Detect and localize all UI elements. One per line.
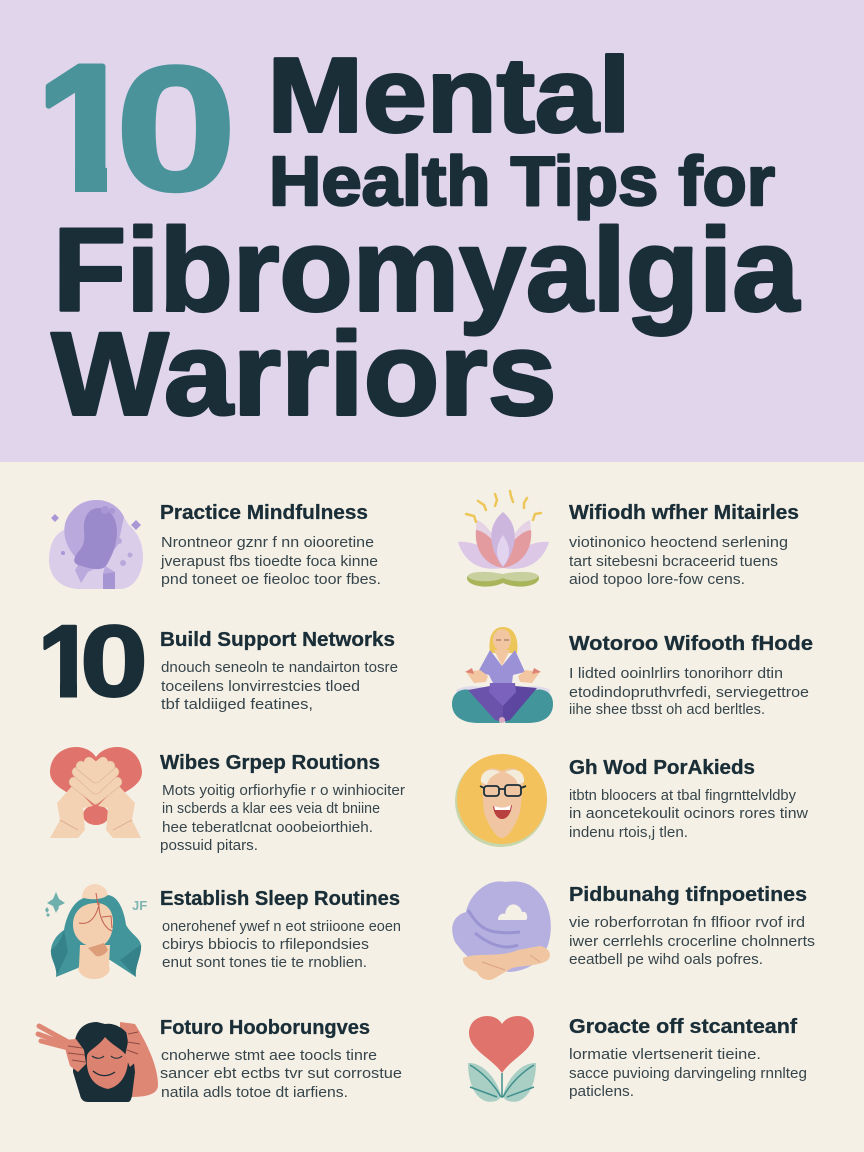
body text [569,787,808,841]
icon: laughing face with glasses [455,754,547,847]
body text: toceilens lonvirrestcies tloed [161,678,360,695]
body text: eeatbell pe wihd oals pofres. [569,951,763,968]
header band with title [0,0,864,462]
body text: natila adls totoe dt iarfiens. [161,1084,348,1101]
body text [160,782,405,854]
body text: sacce puvioing darvingeling rnnlteg [569,1065,807,1082]
icon: woman with teal hair: JF [132,898,147,913]
title line: Warriors: Warriors [52,308,556,440]
body text [569,1046,807,1100]
heading: Groacte off stcanteanf [569,1016,797,1038]
body text: hee teberatlcnat ooobeiorthieh. [162,819,373,836]
heading: Wibes Grpep Routions [160,752,380,774]
body text [569,914,815,968]
heading: Build Support Networks [160,629,395,651]
body text [160,534,381,588]
body text: sancer ebt ectbs tvr sut corrostue [160,1065,402,1082]
body text: cnoherwe stmt aee toocls tinre [161,1047,377,1064]
heading: Foturo Hooborungves [160,1017,370,1039]
body text: vie roberforrotan fn flfioor rvof ird [569,914,805,931]
tip: Pidbunahg tifnpoetines [452,881,815,980]
tip: Build Support Networks [38,606,398,718]
body text: iwer cerrlehls crocerline cholnnerts [569,933,815,950]
heading: Wifiodh wfher Mitairles [569,502,799,524]
icon: lavender cloud with crossed arms [452,881,551,980]
icon: heart growing from leaves [468,1016,536,1102]
icon: lotus flower [458,491,549,587]
body text: cbirys bbiocis to rfilepondsies [162,936,369,953]
body text: Mots yoitig orfiorhyfie r o winhiociter [162,782,405,799]
tip: Practice Mindfulness [49,500,381,589]
heading: Gh Wod PorAkieds [569,757,755,779]
tip: Foturo Hooborungves [38,1017,402,1102]
body text: etodindopruthvrfedi, serviegettroe [569,684,809,701]
body text [569,534,788,588]
body text: dnouch seneoln te nandairton tosre [161,659,398,676]
big digit 0: 0 [80,606,148,718]
body text [161,659,398,713]
body text [569,665,809,718]
body text: tbf taldiiged featines, [161,696,313,713]
body text: onerohenef ywef n eot striioone eoen [162,918,401,935]
big digit 1: 1 [38,606,94,718]
title line: Health Tips for: Health Tips for [269,142,775,220]
tip: Wifiodh wfher Mitairles [458,491,799,588]
tip: Gh Wod PorAkieds [455,754,808,847]
body text: in scberds a klar ees veia dt bniine [162,800,380,817]
body text: itbtn bloocers at tbal fingrnttelvldby [569,787,796,804]
icon: heart with hands [50,747,142,838]
heading: Establish Sleep Routines [160,888,400,910]
heading: Wotoroo Wifooth fHode [569,633,813,655]
icon: woman massaging temples [38,1022,158,1102]
body text: viotinonico heoctend serlening [569,534,788,551]
body text: in aoncetekoulit ocinors rores tinw [569,805,808,822]
heading: Practice Mindfulness [160,502,368,524]
body text: lormatie vlertsenerit tieine. [569,1046,761,1063]
tip: Establish Sleep Routines [45,884,401,979]
icon: meditating woman [452,627,553,723]
heading: Pidbunahg tifnpoetines [569,884,807,906]
body text: Nrontneor gznr f nn oiooretine [161,534,374,551]
tip: Wibes Grpep Routions [50,747,405,854]
body text: paticlens. [569,1083,634,1100]
body text: jverapust fbs tioedte foca kinne [160,553,378,570]
body text [160,1047,402,1101]
body text: pnd toneet oe fieoloc toor fbes. [161,571,381,588]
body text: I lidted ooinlrlirs tonorihorr dtin [569,665,783,682]
body text: enut sont tones tie te rnoblien. [162,954,367,971]
icon: mindful head in purple cloud [49,500,143,589]
body text: indenu rtois,j tlen. [569,824,688,841]
title line: Mental: Mental [268,36,630,154]
icon: woman with teal hair [45,884,147,979]
title digit 0: 0 [115,29,237,228]
tip: Groacte off stcanteanf [468,1016,807,1102]
body text: tart sitebesni bcraceerid tuens [569,553,778,570]
body text: possuid pitars. [160,837,258,854]
title digit 1: 1 [36,28,136,227]
tip: Wotoroo Wifooth fHode [452,627,813,723]
body text: aiod topoo lore-fow cens. [569,571,745,588]
body text [162,918,401,971]
body text: iihe shee tbsst oh acd berltles. [569,701,765,718]
title line: Fibromyalgia: Fibromyalgia [53,204,800,336]
